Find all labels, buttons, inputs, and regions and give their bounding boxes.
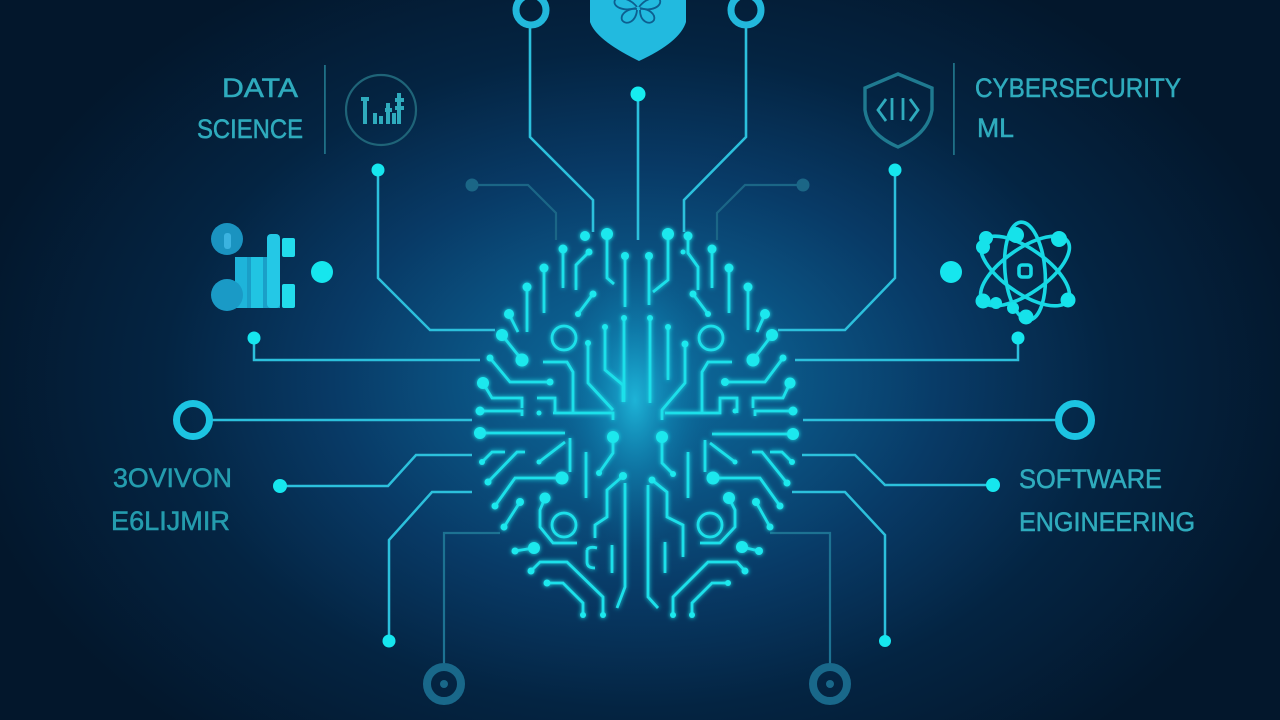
top connectors (478, 26, 797, 240)
icon: dim chart in circle (346, 75, 416, 145)
text: line two: E6LIJMIR (111, 506, 230, 536)
divider: right (953, 63, 955, 155)
text: science: SCIENCE (197, 114, 303, 144)
top centre dot (630, 86, 646, 102)
brain: right hemisphere traces (648, 234, 793, 615)
label: software engineering (1019, 464, 1195, 537)
icon: bar chart with circles (211, 223, 295, 311)
dot: beside chart (311, 261, 333, 283)
connector: top left ring (530, 26, 593, 232)
dot: beside atom (940, 261, 962, 283)
text: cybersecurity: CYBERSECURITY (975, 73, 1181, 103)
ring: left (176, 404, 210, 436)
brain: ring nodes (552, 326, 723, 537)
top shield icon (590, 0, 686, 61)
connector: top right ring (684, 26, 746, 232)
ring: dim bottom left (427, 667, 461, 701)
dim right dot (796, 178, 810, 192)
connector: dim right (717, 185, 797, 240)
label: left lower garbled (111, 463, 232, 536)
connector: top centre (637, 98, 639, 240)
label: cybersecurity ml (975, 73, 1181, 143)
connector: dim left (478, 185, 556, 240)
top left ring (516, 0, 546, 25)
brain: nodes (474, 228, 799, 618)
text: line one: 3OVIVON (113, 463, 232, 493)
brain circuit (474, 228, 799, 618)
icon: atom (970, 220, 1080, 324)
text: data: DATA (222, 73, 298, 103)
divider: left (324, 65, 326, 154)
text: ml: ML (977, 113, 1014, 143)
shield flower emblem (614, 0, 660, 23)
text: software: SOFTWARE (1019, 464, 1162, 494)
text: engineering: ENGINEERING (1019, 507, 1195, 537)
connector end dots (248, 164, 1024, 648)
dim left dot (466, 178, 478, 192)
icon: code shield (865, 74, 932, 147)
ring: dim bottom right (813, 667, 847, 701)
brain: left hemisphere traces (480, 234, 625, 615)
central glow (480, 220, 800, 580)
label: data science (197, 73, 303, 144)
ring: right (1058, 404, 1092, 436)
top right ring (731, 0, 761, 25)
side connectors (212, 170, 1056, 665)
